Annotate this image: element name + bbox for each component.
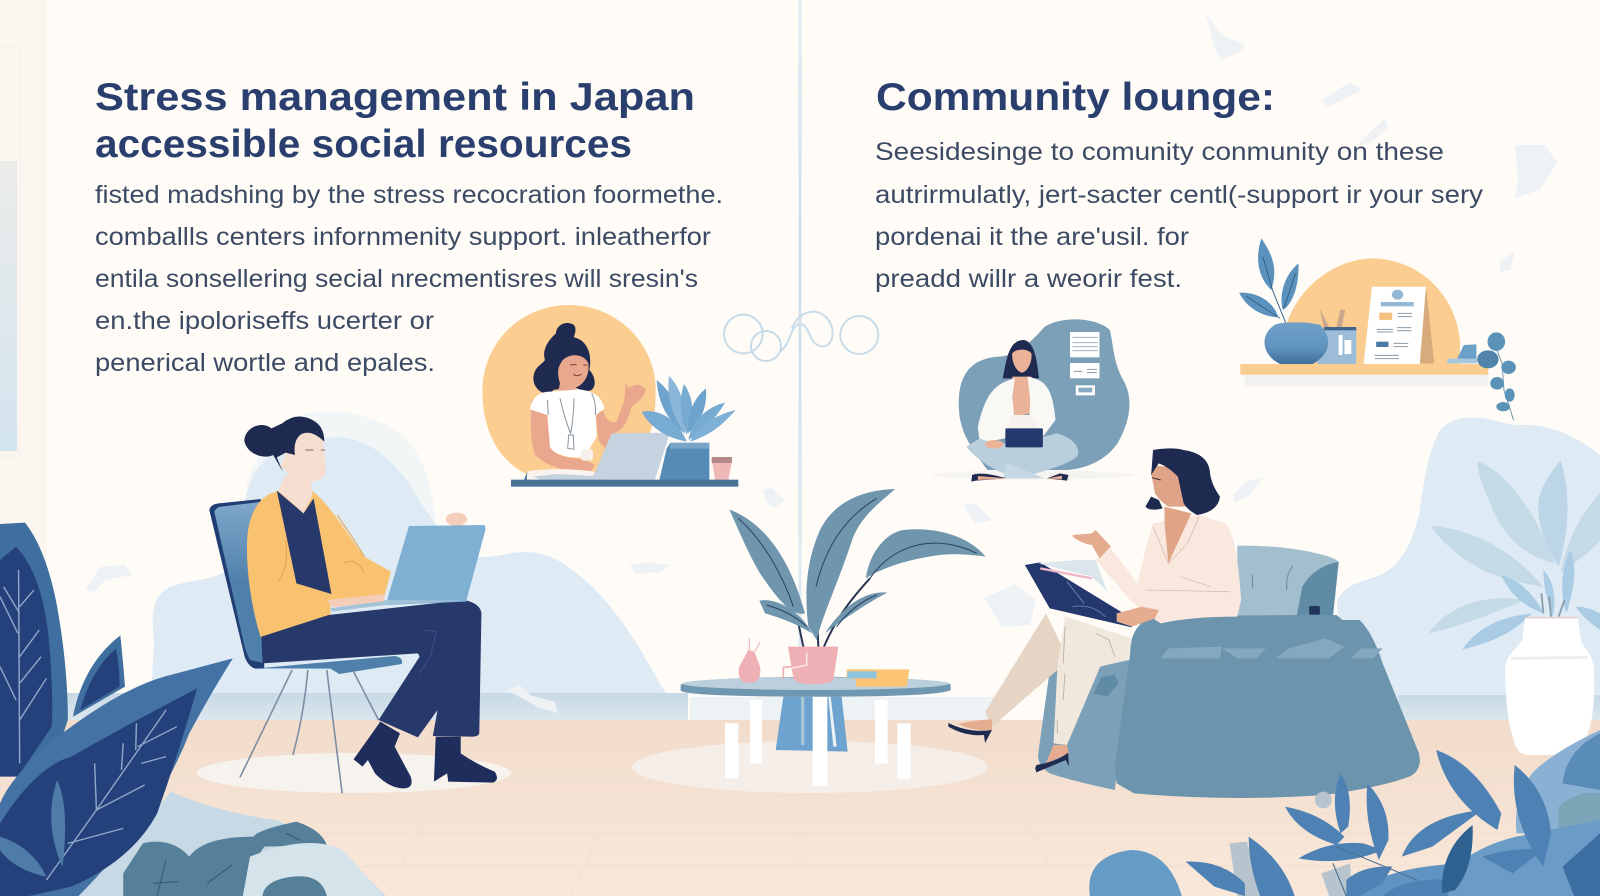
face — [1151, 466, 1191, 507]
hair — [244, 417, 324, 472]
icon: chain of linked rings — [724, 312, 878, 361]
note cards — [1070, 332, 1100, 357]
boots — [354, 722, 412, 788]
plants: bottom right foliage — [1089, 730, 1600, 896]
heading: left: Stress management in Japan — [95, 76, 695, 119]
cup — [712, 463, 732, 480]
table legs and pedestal — [776, 697, 848, 752]
pot — [659, 443, 709, 480]
laptop — [592, 433, 670, 480]
body text: right: Seesidesinge to comunity conmunity on these — [875, 138, 1444, 166]
cardigan — [247, 489, 391, 637]
leaves — [729, 509, 805, 614]
coffee table with potted plant — [681, 489, 986, 786]
books — [847, 669, 909, 687]
body text: left: entila sonsellering secial nrecmentisres will sresin's — [95, 265, 698, 293]
body text: right: pordenai it the are'usil. for — [875, 223, 1189, 251]
trousers — [261, 600, 481, 737]
shirt — [277, 491, 331, 594]
left wall strip with window — [0, 0, 47, 896]
hand — [985, 440, 1003, 449]
pale bush — [79, 792, 386, 896]
body text: left: fisted madshing by the stress recocration foormethe. — [95, 181, 723, 209]
hair — [1003, 340, 1039, 378]
desk — [511, 480, 738, 487]
chair cushion — [1115, 615, 1420, 798]
heading: right: Community lounge: — [876, 76, 1275, 119]
plant leaves — [1258, 238, 1274, 290]
chair lower left — [1038, 660, 1130, 790]
back leaf — [0, 523, 68, 777]
illustration: woman at laptop in orange circle — [482, 305, 738, 487]
shelf — [1240, 364, 1488, 375]
pot — [1264, 322, 1328, 364]
small leaf — [73, 635, 125, 717]
chair back — [1237, 546, 1339, 617]
leaves — [1477, 461, 1555, 563]
heading: left second line: accessible social resources — [95, 123, 632, 166]
near leg — [1054, 617, 1132, 745]
body text: right: preadd willr a weorir fest. — [875, 265, 1182, 293]
blouse — [1096, 515, 1241, 623]
illustration: woman reading in armchair — [948, 448, 1420, 798]
floor — [0, 720, 1600, 896]
right lounge plant in white vase — [1429, 461, 1600, 755]
small box — [1457, 344, 1476, 360]
plant stems — [798, 578, 870, 647]
book — [1025, 562, 1132, 627]
hand raised — [1073, 530, 1111, 558]
face and chest — [1012, 350, 1032, 373]
shelf shadow — [1245, 373, 1489, 387]
desk plant leaves — [642, 411, 687, 442]
body text: left — [95, 181, 723, 377]
plants: bottom left foliage — [0, 523, 386, 896]
hair — [533, 323, 595, 393]
backdrop: right cloud shapes — [690, 417, 1600, 720]
tablet — [1005, 428, 1043, 447]
body text: left: comballls centers infornmenity support. inleatherfor — [95, 223, 711, 251]
jacket — [978, 377, 1056, 443]
trailing vine — [1494, 343, 1514, 420]
arch — [1286, 258, 1460, 367]
rug: centre — [632, 741, 988, 793]
chair — [209, 499, 402, 793]
backdrop: left cloud shapes — [66, 411, 688, 720]
teal leaves — [123, 822, 327, 896]
illustration: woman seated with laptop on blue chair — [209, 417, 497, 793]
cup in hand — [581, 449, 593, 461]
skin — [557, 355, 589, 398]
centre divider line — [798, 0, 802, 700]
vase — [1505, 618, 1594, 755]
rug: left — [197, 753, 511, 793]
illustration: shelf with plant, notice board and orange arch — [1239, 238, 1516, 420]
lower hand — [1117, 607, 1159, 627]
blouse — [530, 389, 604, 458]
body text: left: en.the ipoloriseffs ucerter or — [95, 307, 434, 335]
far leg and shoe — [948, 613, 1069, 743]
neckline — [1165, 507, 1191, 563]
shoe — [1046, 745, 1069, 763]
legs — [966, 433, 1078, 478]
shadow — [932, 470, 1135, 480]
laptop — [446, 513, 467, 526]
feet — [971, 474, 1007, 482]
body text: right — [875, 138, 1484, 293]
large front leaf — [0, 658, 233, 896]
pink pot — [783, 667, 793, 678]
pen pot — [1320, 308, 1345, 328]
pink vase — [749, 638, 760, 652]
neck and face — [278, 475, 312, 513]
table top — [681, 677, 951, 697]
blob backdrop — [959, 319, 1129, 470]
body text: right: autrirmulatly, jert-sacter centl(-support ir your sery — [875, 181, 1484, 209]
illustration: meditating woman with notes — [932, 319, 1135, 482]
notice board — [1364, 287, 1434, 364]
hair — [1151, 448, 1220, 515]
floating paper flecks — [85, 12, 1557, 713]
body text: left: penerical wortle and epales. — [95, 349, 435, 377]
